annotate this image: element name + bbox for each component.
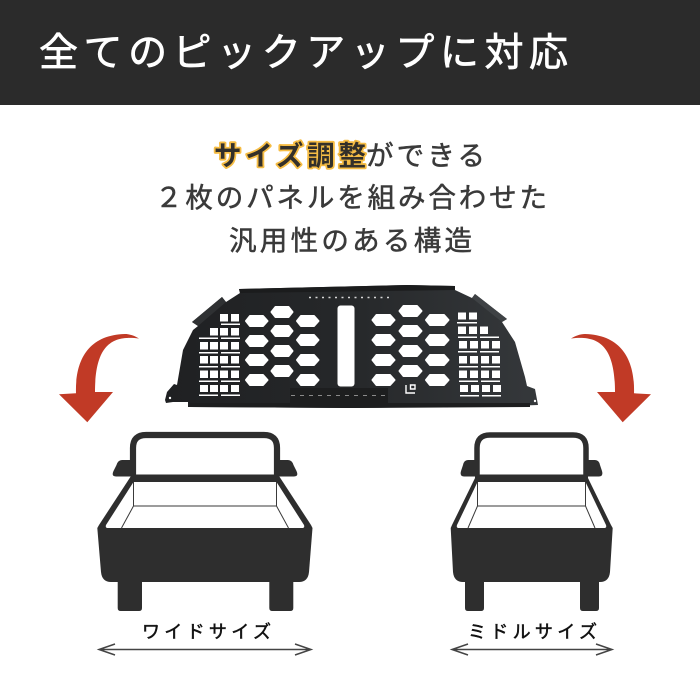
- panel body: [165, 285, 538, 408]
- left red curved arrow: [59, 334, 139, 422]
- top row of small slots: [309, 296, 390, 298]
- cab roll bar: [133, 435, 277, 476]
- left ear hole: [169, 397, 171, 399]
- right ear hole: [534, 400, 536, 402]
- line 1 remainder: ができる: [366, 140, 485, 171]
- mirrors: [113, 460, 297, 476]
- label: middle size: ミドルサイズ: [468, 622, 597, 642]
- left square grid: [199, 314, 240, 396]
- tailgate bar: [133, 474, 277, 482]
- line 3: 汎用性のある構造: [229, 225, 472, 256]
- hexagon cut-outs: [246, 306, 448, 385]
- truck bed and body: [451, 476, 613, 582]
- tailgate bar: [475, 474, 588, 482]
- label: wide size: ワイドサイズ: [142, 622, 271, 642]
- bed inner lines: [122, 482, 288, 528]
- wide size double arrow: [99, 644, 311, 655]
- bed interior: [457, 482, 606, 528]
- wheels: [118, 580, 293, 611]
- title: 全てのピックアップに対応: [39, 32, 568, 75]
- product photo: modular panel: [165, 285, 538, 408]
- wheels: [465, 580, 599, 611]
- line 2: ２枚のパネルを組み合わせた: [155, 182, 547, 213]
- bottom rail shading: [190, 388, 530, 408]
- highlighted phrase: サイズ調整: [214, 140, 366, 171]
- left bracket: [192, 297, 226, 326]
- right square grid: [457, 312, 501, 396]
- middle size double arrow: [452, 644, 612, 655]
- top rail shading: [239, 285, 455, 293]
- middle pickup truck icon: [451, 435, 613, 611]
- bed interior: [106, 482, 304, 528]
- truck bed and body: [97, 476, 312, 582]
- header band: [0, 0, 700, 105]
- cab roll bar: [477, 435, 586, 476]
- right red curved arrow: [571, 334, 651, 422]
- intro text block: [155, 140, 547, 256]
- mirrors: [461, 460, 602, 476]
- bed inner lines: [468, 482, 595, 528]
- wide pickup truck icon: [97, 435, 312, 611]
- logo mark: [406, 385, 415, 393]
- centre slot: [338, 306, 354, 386]
- right bracket highlight: [472, 294, 507, 322]
- bottom row of small slots: [291, 394, 388, 396]
